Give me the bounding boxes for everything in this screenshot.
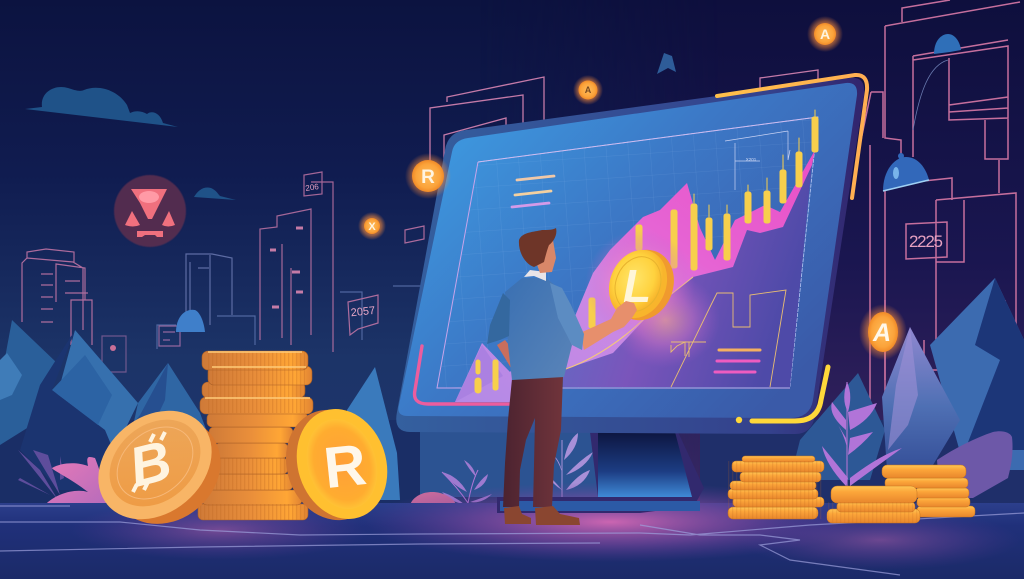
floating coin A right <box>859 304 907 360</box>
label: 206 sign: 206 <box>305 182 320 193</box>
person: collar <box>524 270 546 281</box>
mountains right <box>700 278 1024 505</box>
plant: centre right <box>546 433 593 503</box>
coin stack: right C <box>882 465 975 517</box>
plant: far left dark <box>18 450 64 500</box>
chart: lower shaded area <box>563 153 813 387</box>
monitor: front bezel <box>398 83 857 418</box>
chart: inner step-line outline <box>671 290 786 387</box>
person: face <box>536 240 556 273</box>
coin stack: left <box>198 351 313 520</box>
person: left shoe <box>504 506 531 524</box>
coin: Bitcoin <box>77 388 242 546</box>
monitor stand <box>497 432 704 513</box>
coin: R <box>272 397 401 532</box>
pink leaves left <box>45 457 120 520</box>
floating coin small top <box>573 75 603 105</box>
plant: far right <box>822 382 902 486</box>
person: left sleeve <box>487 293 510 344</box>
icon: neon trophy badge <box>114 175 186 247</box>
person: trousers <box>503 376 563 507</box>
chart: top-right annotation lines <box>725 131 790 190</box>
accent: yellow bottom right <box>736 367 828 423</box>
cloud: large left <box>25 87 178 127</box>
legend lines top <box>512 176 554 207</box>
chart: magenta price band <box>455 150 815 402</box>
coin stack: right B <box>827 486 920 523</box>
floating coin small top: A <box>585 85 592 95</box>
person: left hand on hip <box>497 340 513 368</box>
chart: glow under coin <box>610 272 720 368</box>
neon city skyline right <box>860 0 1020 520</box>
floating coin A top right <box>807 16 843 52</box>
coin on chart: L <box>585 230 695 340</box>
pink bush near monitor <box>410 492 456 505</box>
plants <box>18 382 902 504</box>
floating coin X: X <box>368 221 376 233</box>
icon: top lamp <box>913 34 961 130</box>
floating coin X <box>358 212 386 240</box>
monitor: back bezel <box>396 78 864 434</box>
monitor <box>396 78 864 434</box>
person: right sleeve <box>550 283 584 350</box>
person: forearm and hand <box>580 301 637 350</box>
person: hair <box>519 228 556 267</box>
legend lines bottom <box>715 350 760 372</box>
floating coin R: R <box>421 167 435 188</box>
chart: gold trend line <box>563 277 693 370</box>
ground floor <box>0 482 1024 579</box>
bitcoin symbol: B <box>123 428 177 499</box>
accent: pink bottom left <box>415 346 520 404</box>
cloud: small <box>194 187 236 200</box>
label: 2057 bubble: 2057 <box>350 305 376 319</box>
mountains left <box>0 320 612 505</box>
monitor: chart panel <box>437 110 818 402</box>
floating coin R <box>405 153 451 199</box>
R letter: R <box>321 432 369 501</box>
label: 2225 sign: 2225 <box>909 232 943 251</box>
chart: candlesticks <box>475 110 818 393</box>
icon: large lamp <box>883 153 929 191</box>
purple rock <box>937 431 1013 498</box>
floating coin A top right: A <box>820 26 830 42</box>
plant: centre left <box>442 460 492 504</box>
coin stack: right A <box>728 456 824 519</box>
icon: small hanging lamp <box>176 310 205 332</box>
person: right shoe <box>535 506 580 525</box>
background sky <box>0 131 1024 503</box>
neon city skyline left <box>22 172 424 372</box>
chart label: X201 <box>746 157 757 162</box>
accent line: gold top right <box>717 75 867 198</box>
coin on chart: L: L <box>623 260 651 312</box>
floating coin A right: A <box>872 319 891 347</box>
neon circuit frames behind monitor <box>430 70 818 190</box>
icon: top small lamp <box>657 53 676 74</box>
person: torso jacket <box>505 278 572 380</box>
person <box>487 228 637 525</box>
